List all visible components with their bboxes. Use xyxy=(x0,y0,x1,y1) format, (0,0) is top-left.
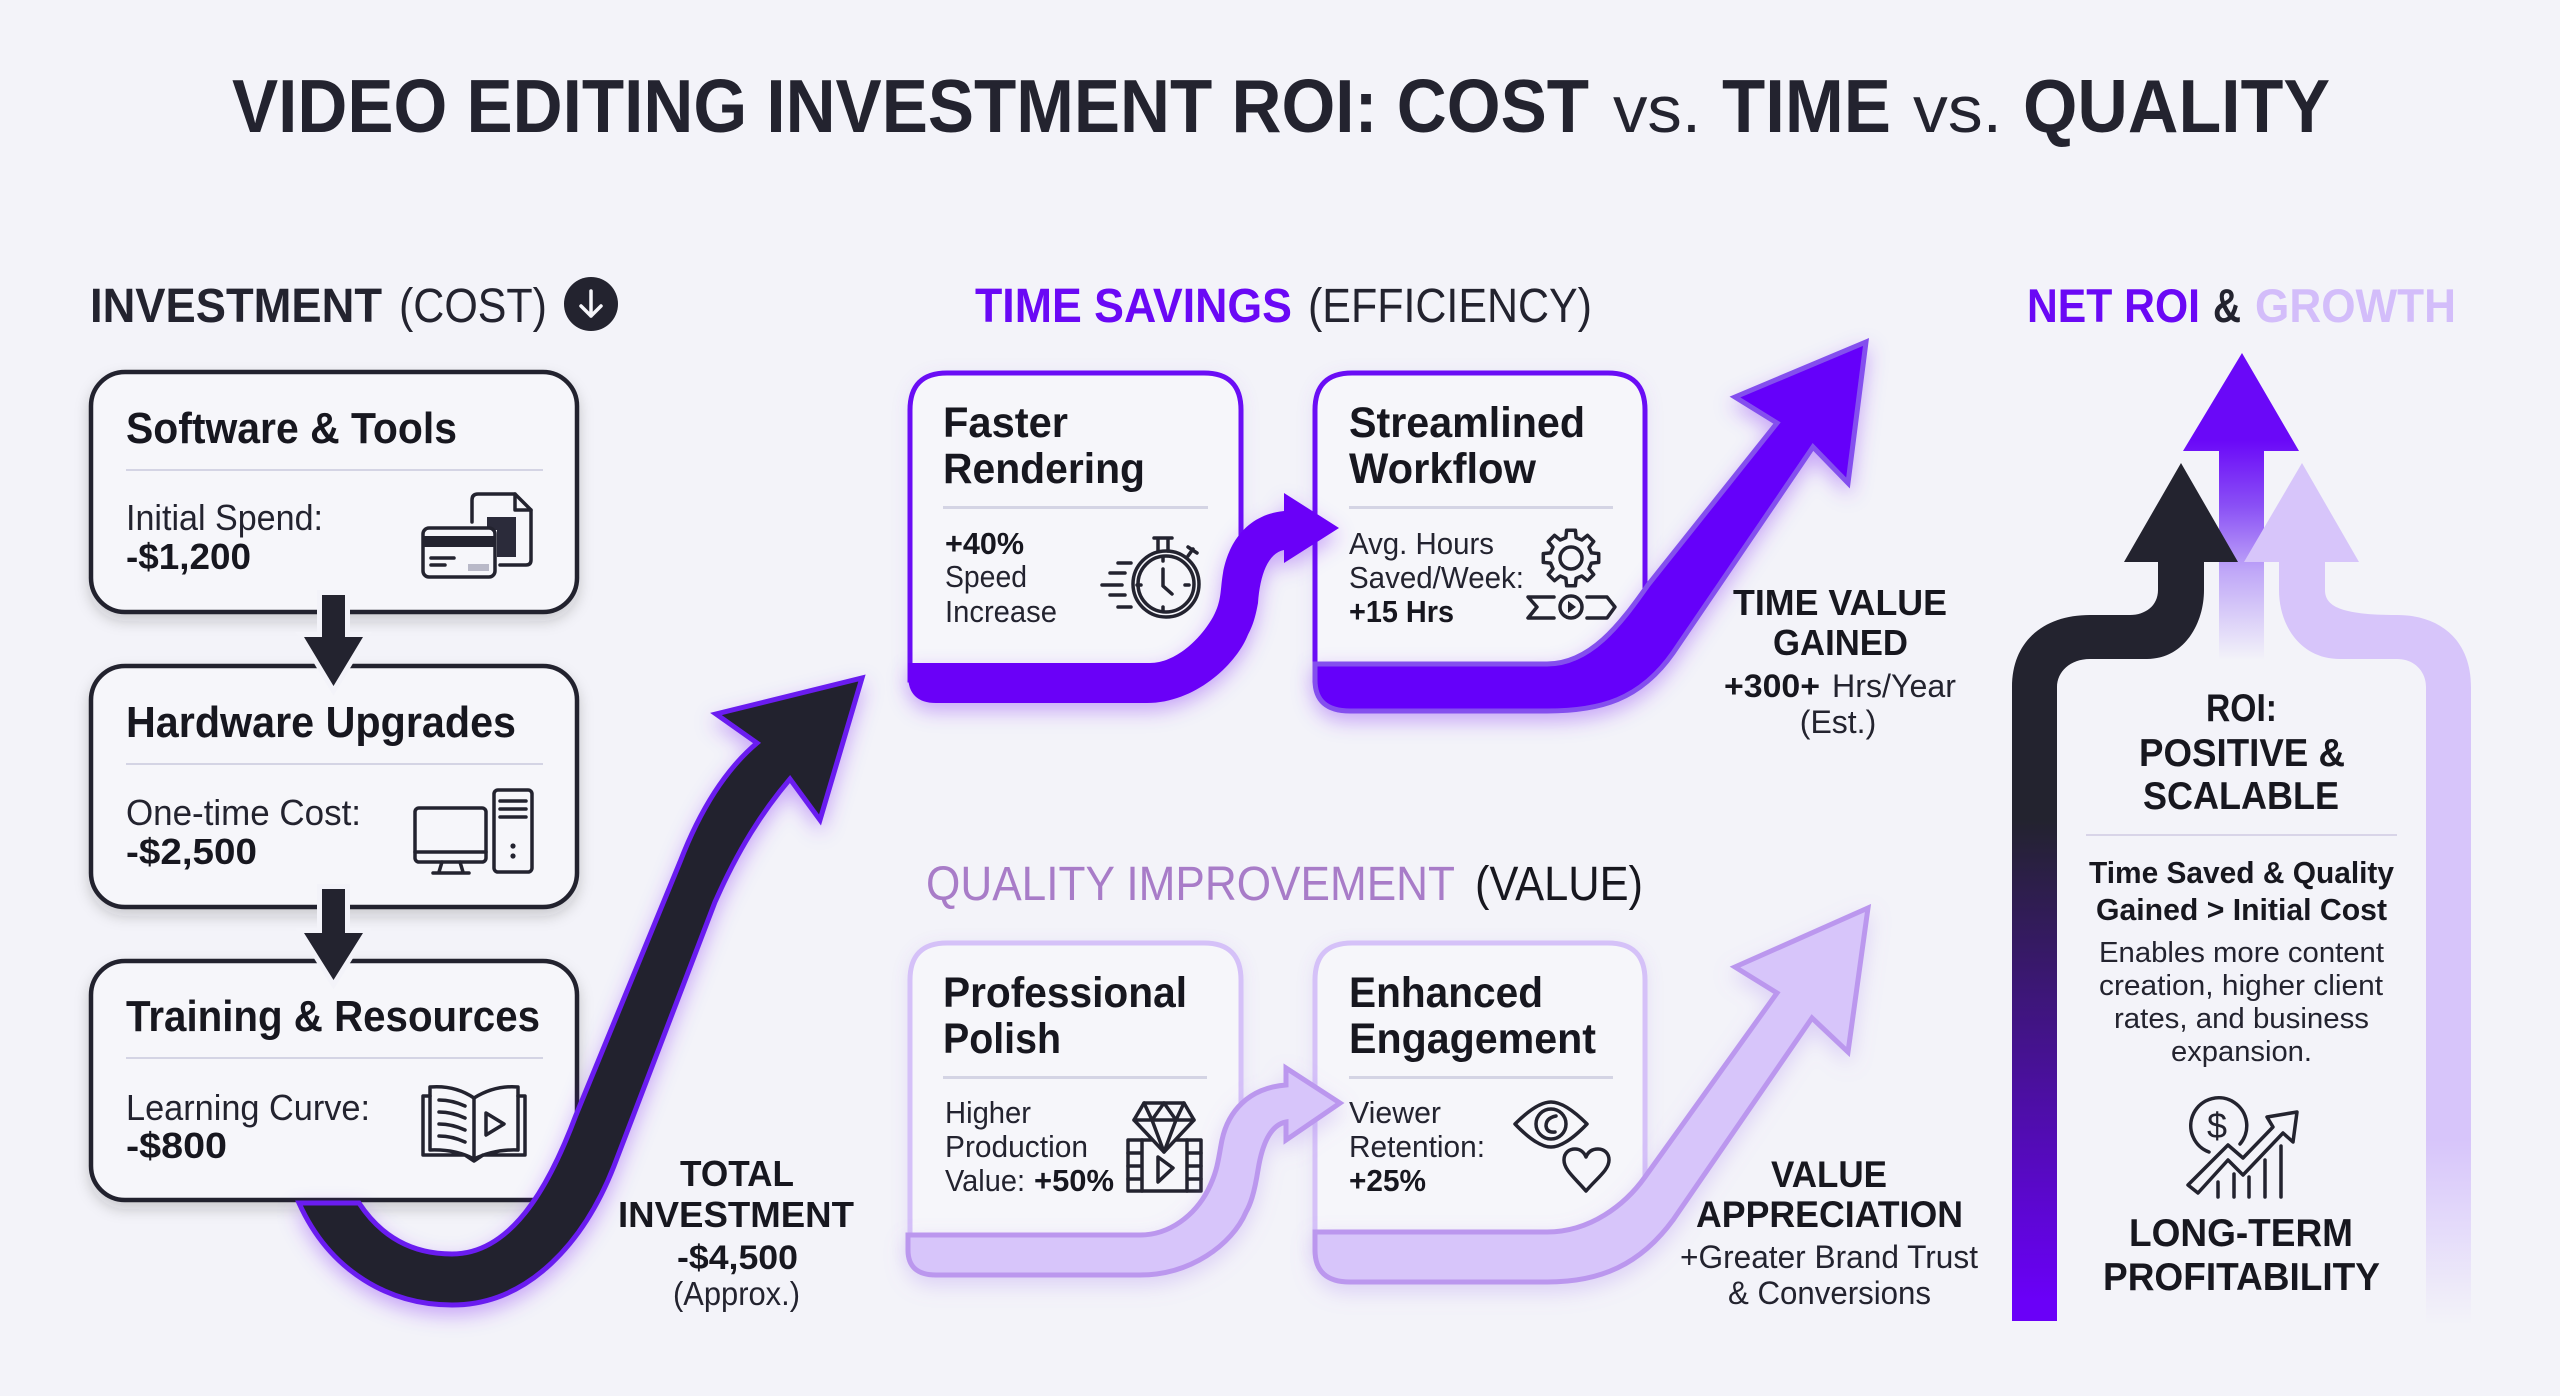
panel: streamlined workflow: +15 Hrs xyxy=(1349,594,1454,629)
title: vs. xyxy=(1913,72,2002,146)
panel: enhanced engagement: Viewer xyxy=(1349,1095,1441,1130)
text: long-term profitability: LONG-TERM xyxy=(2129,1212,2353,1255)
panel: streamlined workflow: Workflow xyxy=(1349,445,1537,493)
text: roi summary: Enables more content xyxy=(2099,937,2384,969)
panel: professional polish: +50% xyxy=(1034,1163,1114,1198)
text: roi summary: creation, higher client xyxy=(2099,970,2383,1002)
panel: enhanced engagement xyxy=(1315,943,1645,1250)
text: value appreciation: +Greater Brand Trust xyxy=(1680,1239,1978,1275)
panel: training and resources: Training & Resources xyxy=(126,992,540,1041)
panel: faster rendering: +40% xyxy=(945,526,1024,561)
text: roi summary: SCALABLE xyxy=(2143,775,2339,818)
text: time value gained: Hrs/Year xyxy=(1832,668,1956,704)
arrow: quality ribbon 2 xyxy=(1315,908,1868,1282)
text: roi summary xyxy=(2086,687,2397,1068)
text: value appreciation: APPRECIATION xyxy=(1696,1194,1963,1235)
text: roi summary: Gained > Initial Cost xyxy=(2096,892,2387,927)
panel: hardware upgrades xyxy=(91,666,577,907)
panel: professional polish: Value: xyxy=(945,1163,1025,1198)
panel: enhanced engagement: Retention: xyxy=(1349,1129,1485,1164)
panel: streamlined workflow: Saved/Week: xyxy=(1349,560,1524,595)
text: roi summary: POSITIVE & xyxy=(2139,732,2345,775)
arrow: total investment curve xyxy=(299,678,862,1305)
text: roi summary: Time Saved & Quality xyxy=(2089,855,2395,890)
panel: professional polish: Production xyxy=(945,1129,1088,1164)
heading: quality improvement: (VALUE) xyxy=(1475,858,1643,911)
panel: training and resources: Learning Curve: xyxy=(126,1087,370,1128)
heading: investment xyxy=(90,277,618,333)
panel: software and tools xyxy=(91,372,577,612)
text: time value gained: (Est.) xyxy=(1800,704,1876,740)
arrow: left growth xyxy=(2012,463,2238,1321)
arrow: time ribbon 2 xyxy=(1315,342,1866,711)
icon: diamond and film xyxy=(1128,1103,1201,1191)
heading: investment: (COST) xyxy=(399,280,547,333)
text: roi summary: expansion. xyxy=(2171,1036,2312,1068)
panel: professional polish xyxy=(910,943,1241,1255)
heading: time savings: TIME SAVINGS xyxy=(975,280,1292,333)
panel: professional polish: Polish xyxy=(943,1015,1061,1063)
panel: streamlined workflow xyxy=(1315,373,1645,680)
title: QUALITY xyxy=(2023,64,2330,148)
text: time value gained: TIME VALUE xyxy=(1733,582,1947,623)
text: total investment: INVESTMENT xyxy=(618,1194,854,1235)
heading: time savings: (EFFICIENCY) xyxy=(1308,280,1592,333)
text: total investment: (Approx.) xyxy=(673,1275,800,1312)
icon: profit growth: $ xyxy=(2207,1105,2227,1146)
icon: card and document xyxy=(423,494,531,577)
panel: faster rendering xyxy=(910,373,1241,680)
panel: training and resources xyxy=(91,961,577,1200)
arrow: time ribbon 1 xyxy=(908,493,1339,703)
panel: enhanced engagement: +25% xyxy=(1349,1163,1426,1198)
icon: profit growth xyxy=(2188,1098,2297,1197)
icon: stopwatch xyxy=(1102,538,1199,617)
text: value appreciation: & Conversions xyxy=(1728,1275,1931,1311)
panel: professional polish: Higher xyxy=(945,1095,1031,1130)
title: VIDEO EDITING INVESTMENT ROI: COST xyxy=(232,64,1589,148)
text: time value gained xyxy=(1724,582,1956,740)
panel: hardware upgrades: -$2,500 xyxy=(126,831,257,872)
panel: software and tools: Software & Tools xyxy=(126,404,457,453)
arrow: right growth xyxy=(2244,463,2471,1325)
text: roi summary: rates, and business xyxy=(2114,1003,2369,1035)
panel: streamlined workflow: Avg. Hours xyxy=(1349,526,1494,561)
text: total investment: TOTAL xyxy=(680,1153,794,1194)
text: total investment: -$4,500 xyxy=(677,1239,798,1277)
panel: faster rendering: Speed xyxy=(945,559,1027,594)
title: TIME xyxy=(1722,64,1891,148)
icon: workflow xyxy=(1528,596,1615,618)
panel: enhanced engagement: Engagement xyxy=(1349,1015,1596,1063)
panel: training and resources: -$800 xyxy=(126,1125,227,1166)
text: roi summary: ROI: xyxy=(2206,687,2277,730)
title: vs. xyxy=(1613,72,1701,146)
text: long-term profitability: PROFITABILITY xyxy=(2103,1256,2380,1299)
icon: heart xyxy=(1564,1149,1609,1191)
icon: eye xyxy=(1515,1102,1587,1147)
panel: hardware upgrades: One-time Cost: xyxy=(126,792,361,833)
panel: streamlined workflow: Streamlined xyxy=(1349,399,1585,447)
arrow: card 2 to card 3 xyxy=(304,889,363,980)
text: value appreciation: VALUE xyxy=(1771,1154,1887,1195)
panel: faster rendering: Increase xyxy=(945,594,1057,629)
heading: investment: INVESTMENT xyxy=(90,280,382,333)
panel: faster rendering: Faster xyxy=(943,399,1068,447)
icon: gear xyxy=(1543,530,1599,586)
icon: open book xyxy=(423,1087,525,1161)
icon: computer xyxy=(415,790,532,873)
panel: faster rendering: Rendering xyxy=(943,445,1145,493)
heading: net roi and growth xyxy=(2027,279,2456,332)
text: time value gained: GAINED xyxy=(1773,622,1908,663)
text: time value gained: +300+ xyxy=(1724,668,1820,704)
panel: enhanced engagement: Enhanced xyxy=(1349,969,1543,1017)
heading: net roi and growth: NET ROI xyxy=(2027,279,2200,332)
heading: quality improvement: QUALITY IMPROVEMENT xyxy=(926,858,1455,911)
arrow: quality ribbon 1 xyxy=(908,1068,1340,1275)
arrow: card 1 to card 2 xyxy=(304,595,363,686)
text: long-term profitability xyxy=(2103,1212,2380,1299)
panel: software and tools: -$1,200 xyxy=(126,536,251,577)
text: total investment xyxy=(618,1153,854,1312)
heading: time savings xyxy=(975,280,1592,333)
panel: software and tools: Initial Spend: xyxy=(126,497,323,538)
arrow: center growth xyxy=(2183,353,2299,659)
text: value appreciation xyxy=(1680,1154,1978,1311)
heading: net roi and growth: & xyxy=(2213,279,2241,332)
panel: professional polish: Professional xyxy=(943,969,1187,1017)
heading: net roi and growth: GROWTH xyxy=(2255,279,2456,332)
panel: hardware upgrades: Hardware Upgrades xyxy=(126,698,516,747)
